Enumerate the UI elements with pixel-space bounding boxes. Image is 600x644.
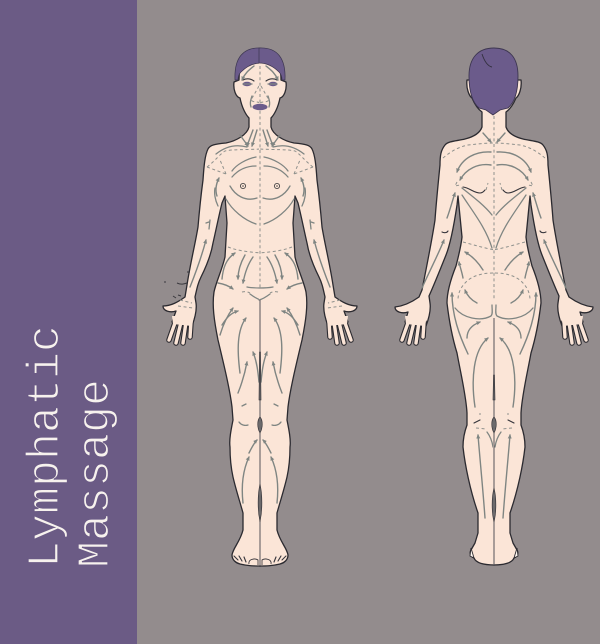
inner leg line, front [259,300,261,566]
panel: purple title band [0,0,137,644]
title: Lymphatic Massage: Lymphatic [21,325,72,568]
hair, back [469,48,518,115]
centre dashed line, front [259,66,261,288]
figure: front view with lymphatic massage arrows [163,48,357,566]
lips [252,104,268,110]
title: Lymphatic Massage: Massage [71,379,122,568]
centre dashed line, back [493,116,495,300]
stray specks [164,272,190,298]
title: Lymphatic Massage [21,325,122,568]
leg gaps, front [258,352,262,522]
hair swirl [482,54,492,67]
leg gaps, back [492,375,496,522]
inner leg line, back [493,318,495,566]
figure: back view with lymphatic massage arrows [395,48,593,566]
